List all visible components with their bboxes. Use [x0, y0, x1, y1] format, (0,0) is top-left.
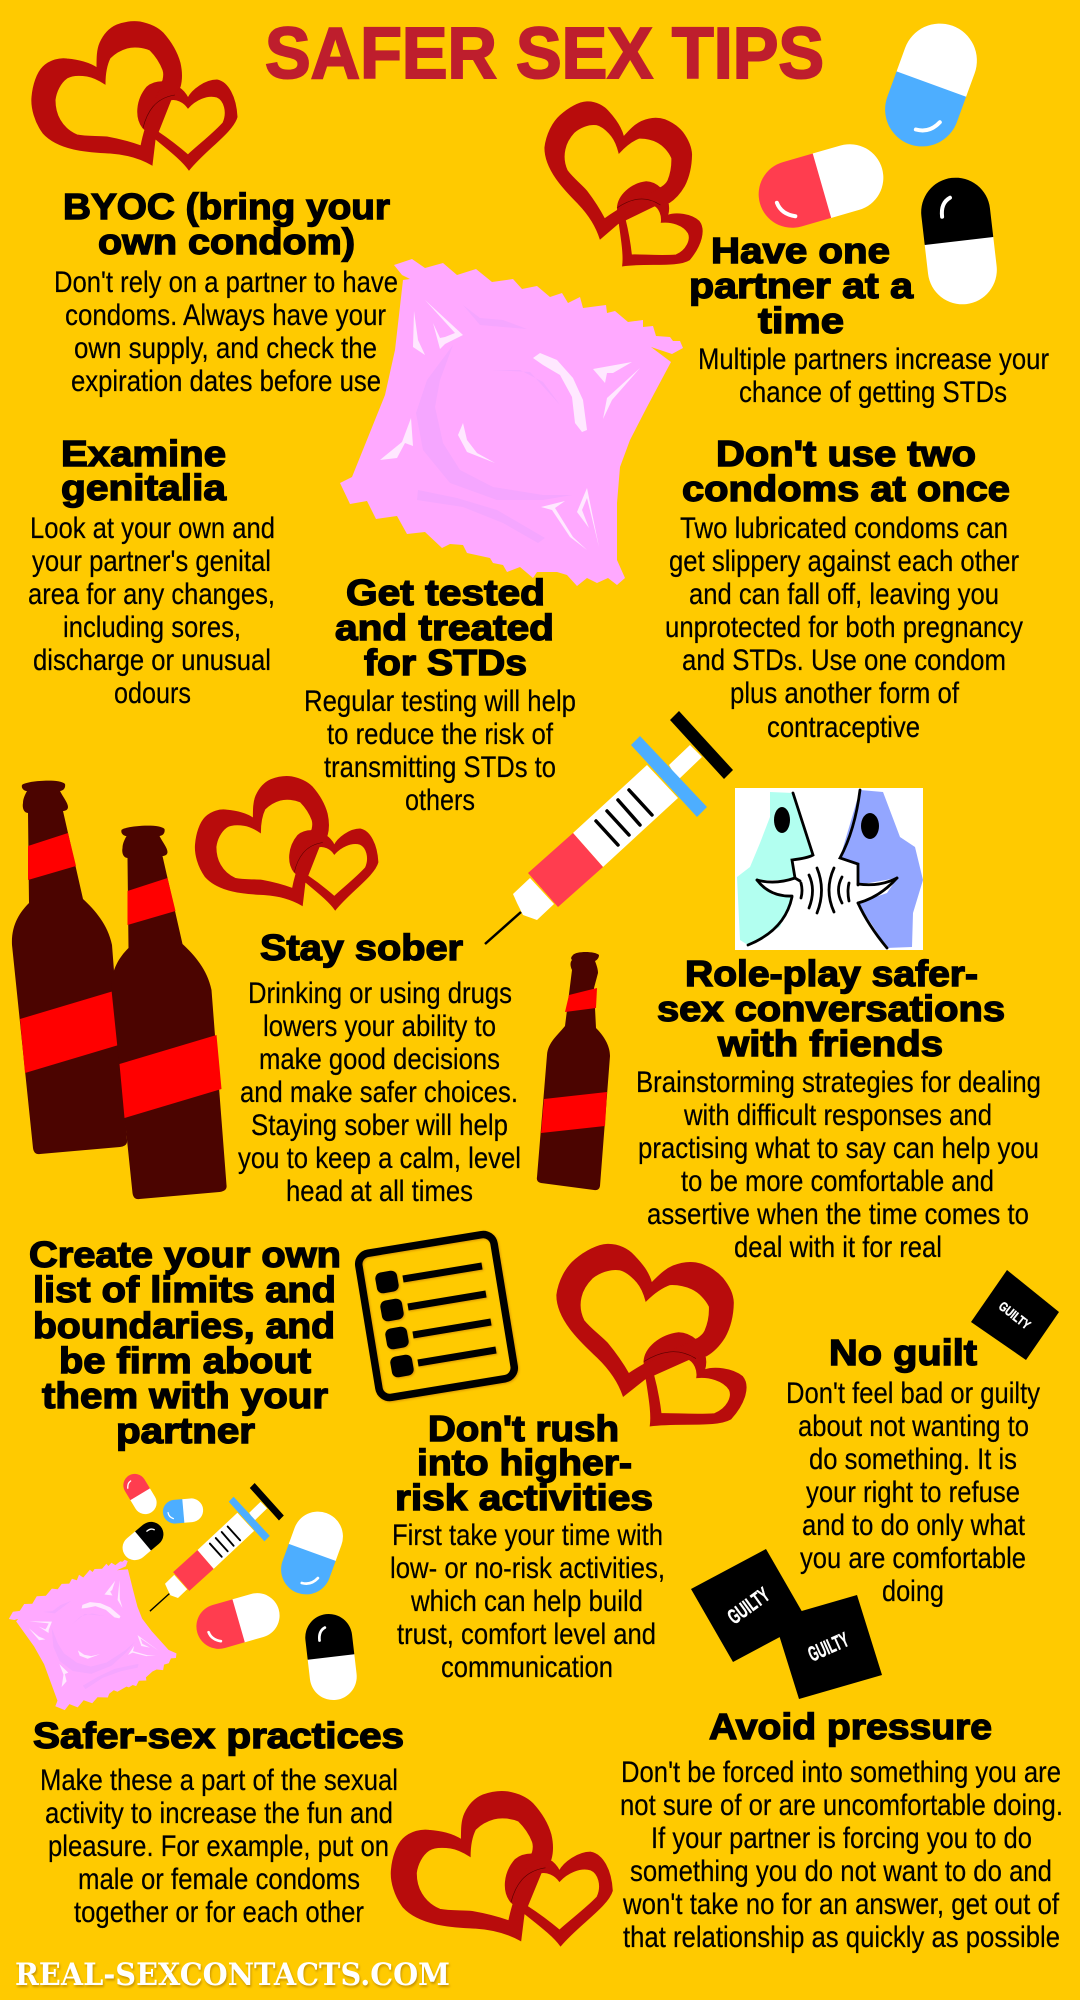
- heading: [689, 230, 914, 341]
- body text: [28, 512, 275, 710]
- body text: and make safer choices.: [240, 1076, 518, 1109]
- body text: odours: [114, 677, 191, 710]
- icon: two faces talking: [735, 788, 923, 950]
- heading: time: [758, 300, 844, 341]
- body text: to reduce the risk of: [327, 718, 554, 751]
- body text: Don't feel bad or guilty: [786, 1377, 1040, 1410]
- body text: condoms. Always have your: [65, 299, 386, 332]
- icon: small beer bottle: [537, 952, 610, 1190]
- body text: get slippery against each other: [669, 545, 1019, 578]
- body text: and to do only what: [802, 1509, 1026, 1542]
- body text: [390, 1519, 665, 1684]
- tip: one partner: [689, 230, 1049, 409]
- icon: hearts middle: [519, 1202, 804, 1460]
- icon: small blue pill: [162, 1497, 204, 1525]
- body text: [238, 977, 521, 1208]
- tip: don't rush: [390, 1408, 665, 1684]
- body text: which can help build: [410, 1585, 643, 1618]
- heading: Safer-sex practices: [33, 1715, 404, 1756]
- title: SAFER SEX TIPS: [265, 14, 824, 94]
- heading: and treated: [335, 607, 554, 648]
- heading: genitalia: [61, 467, 227, 508]
- body text: to be more comfortable and: [681, 1165, 994, 1198]
- body text: assertive when the time comes to: [647, 1198, 1029, 1231]
- body text: lowers your ability to: [263, 1010, 496, 1043]
- body text: pleasure. For example, put on: [48, 1830, 389, 1863]
- body text: about not wanting to: [798, 1410, 1029, 1443]
- body text: expiration dates before use: [71, 365, 381, 398]
- heading: BYOC (bring your: [63, 186, 390, 227]
- icon: small black pill: [118, 1517, 168, 1565]
- body text: [620, 1756, 1063, 1954]
- icon: condom packet: [340, 259, 683, 586]
- body text: together or for each other: [74, 1896, 364, 1929]
- heading: No guilt: [829, 1332, 977, 1373]
- heading: for STDs: [364, 642, 527, 683]
- heading: own condom): [98, 221, 355, 262]
- icon: medium blue pill: [274, 1505, 350, 1601]
- heading: them with your: [42, 1375, 328, 1416]
- body text: area for any changes,: [28, 578, 275, 611]
- heading: Avoid pressure: [709, 1706, 992, 1747]
- body text: Drinking or using drugs: [248, 977, 512, 1010]
- body text: including sores,: [63, 611, 241, 644]
- heading: into higher-: [417, 1442, 632, 1483]
- body text: communication: [441, 1651, 613, 1684]
- heading: Don't use two: [716, 433, 976, 474]
- heading: partner at a: [689, 265, 914, 306]
- tip: no guilt: [786, 1332, 1040, 1608]
- body text: others: [405, 784, 475, 817]
- heading: Role-play safer-: [685, 953, 978, 994]
- icon: checklist: [357, 1233, 516, 1399]
- icon: guilty squares large: GUILTY: [724, 1583, 774, 1629]
- icon: beer bottle second: [111, 826, 227, 1199]
- icon: guilty squares large: [691, 1549, 882, 1699]
- body text: Staying sober will help: [251, 1109, 508, 1142]
- body text: you to keep a calm, level: [238, 1142, 521, 1175]
- body text: your partner's genital: [32, 545, 271, 578]
- heading: Create your own: [29, 1234, 341, 1275]
- tip: BYOC: [54, 186, 398, 398]
- heading: [335, 572, 554, 683]
- icon: beer bottle left: [12, 781, 127, 1154]
- heading: [61, 433, 227, 508]
- icon: small condom packet: [0, 1532, 198, 1740]
- heading: partner: [116, 1410, 255, 1451]
- body text: plus another form of: [730, 677, 960, 710]
- body text: Regular testing will help: [304, 685, 576, 718]
- body text: with difficult responses and: [683, 1099, 992, 1132]
- body text: contraceptive: [767, 711, 920, 744]
- tip: get tested: [304, 572, 576, 817]
- body text: [636, 1066, 1041, 1264]
- body text: chance of getting STDs: [739, 376, 1007, 409]
- icon: medium black pill: [303, 1611, 359, 1703]
- body text: you are comfortable: [800, 1542, 1026, 1575]
- icon: small red pill: [119, 1470, 161, 1518]
- heading: [395, 1408, 653, 1518]
- heading: condoms at once: [682, 468, 1010, 509]
- body text: deal with it for real: [734, 1231, 942, 1264]
- heading: Have one: [711, 230, 890, 271]
- icon: syringe: [485, 711, 733, 944]
- body text: Make these a part of the sexual: [40, 1764, 398, 1797]
- heading: sex conversations: [657, 988, 1005, 1029]
- body text: own supply, and check the: [74, 332, 377, 365]
- icon: guilty square small: [971, 1270, 1059, 1360]
- heading: Examine: [61, 433, 226, 474]
- body text: your right to refuse: [806, 1476, 1020, 1509]
- tip: limits and boundaries: [29, 1234, 341, 1451]
- heading: Get tested: [346, 572, 545, 613]
- tip: avoid pressure: [620, 1706, 1063, 1954]
- tip: safer-sex practices: [33, 1715, 404, 1929]
- icon: red pill: [751, 136, 891, 236]
- heading: be firm about: [59, 1340, 311, 1381]
- body text: Two lubricated condoms can: [680, 512, 1008, 545]
- heading: [657, 953, 1005, 1064]
- icon: hearts top left: [32, 22, 237, 170]
- body text: [54, 266, 398, 398]
- heading: boundaries, and: [33, 1305, 335, 1346]
- tip: two condoms: [665, 433, 1023, 744]
- body text: [786, 1377, 1040, 1608]
- body text: do something. It is: [809, 1443, 1017, 1476]
- body text: discharge or unusual: [33, 644, 271, 677]
- heading: [63, 186, 390, 262]
- icon: guilty squares large: GUILTY: [805, 1628, 852, 1666]
- body text: low- or no-risk activities,: [390, 1552, 665, 1585]
- icon: hearts bottom: [391, 1791, 612, 1946]
- icon: guilty square small: GUILTY: [996, 1298, 1034, 1333]
- icon: medium red pill: [191, 1588, 285, 1654]
- tip: stay sober: [238, 927, 521, 1208]
- body text: Don't rely on a partner to have: [54, 266, 398, 299]
- body text: male or female condoms: [78, 1863, 360, 1896]
- icon: hearts top centre: [514, 63, 750, 296]
- heading: list of limits and: [33, 1269, 336, 1310]
- body text: [665, 512, 1023, 744]
- body text: First take your time with: [392, 1519, 663, 1552]
- icon: small syringe: [150, 1483, 284, 1611]
- body text: activity to increase the fun and: [45, 1797, 393, 1830]
- body text: Look at your own and: [30, 512, 275, 545]
- body text: head at all times: [286, 1175, 473, 1208]
- website footer: REAL-SEXCONTACTS.COM: [15, 1957, 450, 1993]
- heading: Stay sober: [260, 927, 463, 968]
- body text: [698, 343, 1049, 409]
- body text: and can fall off, leaving you: [689, 578, 999, 611]
- heading: [682, 433, 1010, 509]
- body text: [304, 685, 576, 817]
- body text: make good decisions: [259, 1043, 500, 1076]
- heading: [29, 1234, 341, 1451]
- heading: with friends: [717, 1023, 943, 1064]
- heading: risk activities: [395, 1477, 653, 1518]
- body text: trust, comfort level and: [397, 1618, 656, 1651]
- body text: transmitting STDs to: [324, 751, 556, 784]
- tip: role-play: [636, 953, 1041, 1264]
- icon: black pill: [917, 174, 1001, 308]
- tip: examine genitalia: [28, 433, 275, 710]
- heading: Don't rush: [428, 1408, 619, 1449]
- body text: and STDs. Use one condom: [682, 644, 1006, 677]
- body text: [40, 1764, 398, 1929]
- body text: doing: [882, 1575, 944, 1608]
- icon cluster: pills, syringe and condom: [0, 1470, 359, 1740]
- icon: hearts by stay sober: [195, 776, 378, 910]
- icon: blue pill: [875, 13, 987, 157]
- body text: unprotected for both pregnancy: [665, 611, 1023, 644]
